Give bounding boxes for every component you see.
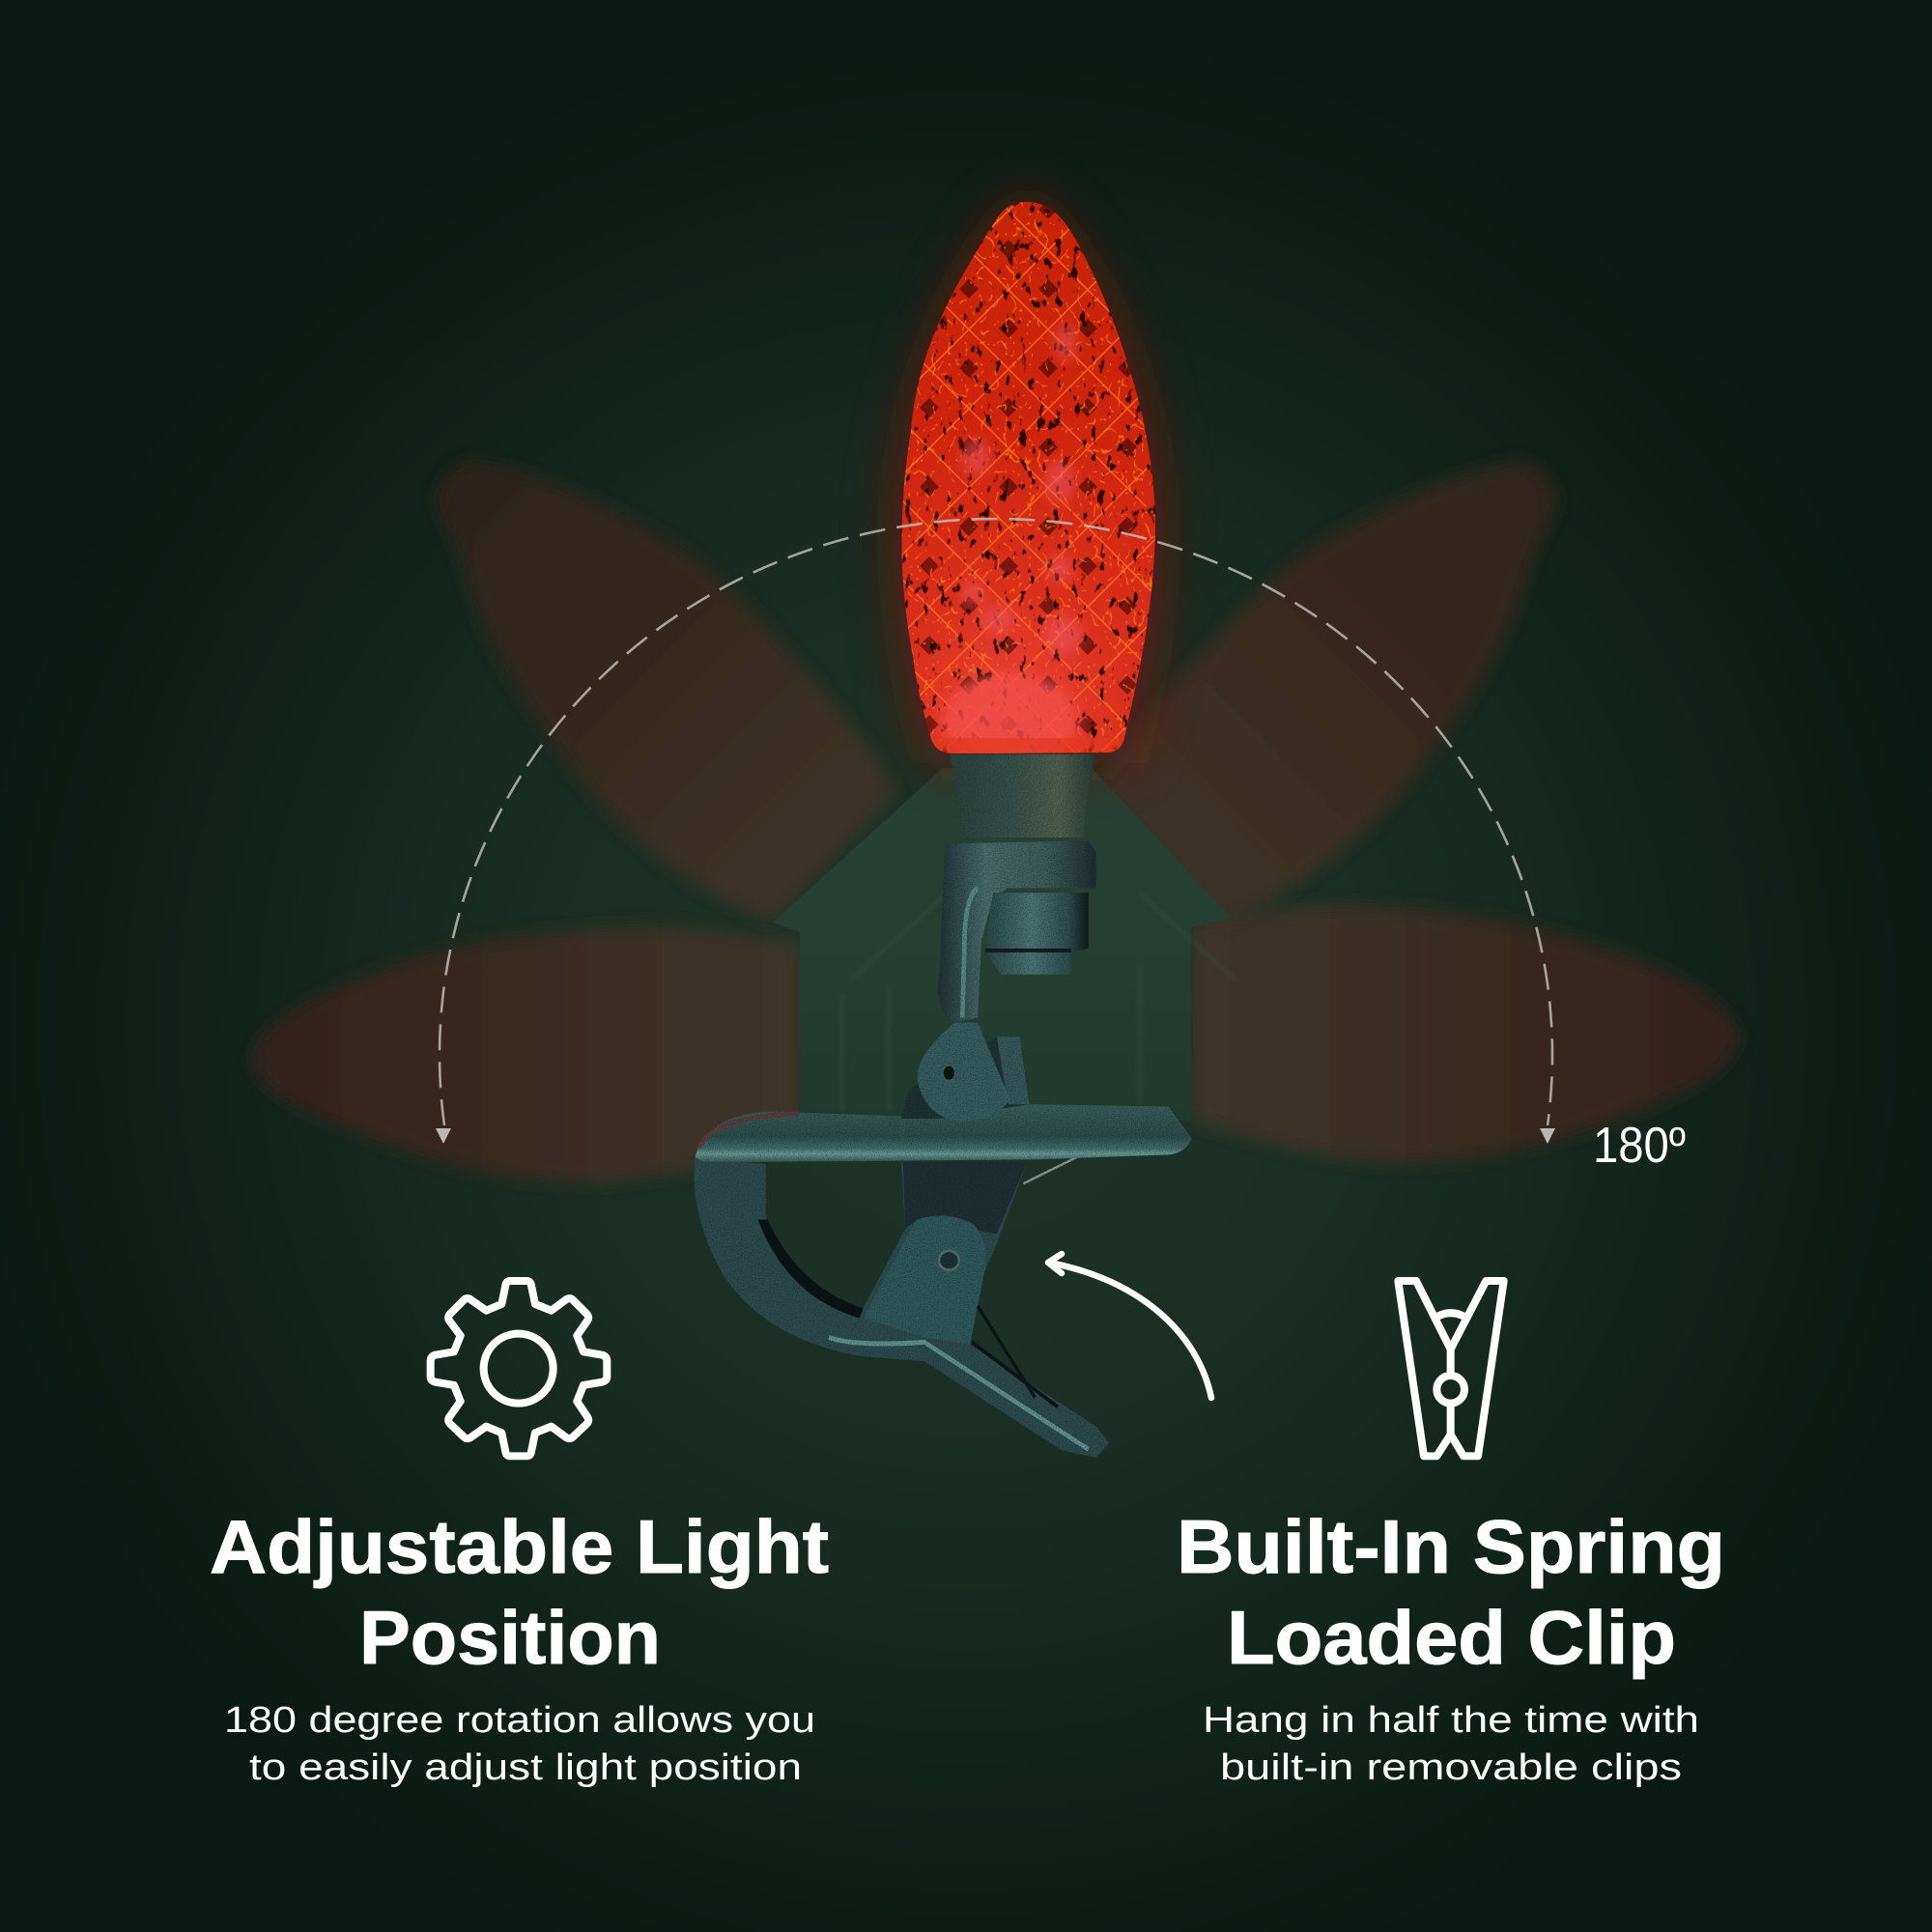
lower clip jaw bbox=[695, 1157, 1109, 1458]
red LED bulb bbox=[894, 193, 1164, 766]
arm and collar bbox=[938, 840, 1096, 1022]
curved arrow bbox=[1048, 1254, 1211, 1398]
dark clip body bbox=[903, 1162, 1027, 1234]
text: clip description: built-in removable clips bbox=[1220, 1747, 1682, 1788]
arc arrowhead left bbox=[436, 1128, 451, 1144]
ghost base inner lines bbox=[842, 894, 1236, 1111]
ghost bases: house shape bbox=[773, 768, 1236, 1121]
jaw inner shadow bbox=[758, 1219, 863, 1318]
bulb pink highlights bbox=[961, 324, 1082, 654]
dashed 180 degree arc bbox=[436, 519, 1555, 1144]
clip highlights bbox=[829, 1337, 1089, 1449]
back joint bbox=[901, 1037, 1029, 1119]
text: clip description: Hang in half the time with bbox=[1203, 1700, 1699, 1741]
heading: built-in spring loaded clip: Built-In Spring bbox=[1177, 1504, 1725, 1589]
ghost bulb: upper left bbox=[435, 460, 896, 923]
spring wire bbox=[972, 1306, 1058, 1406]
bulb socket bbox=[949, 754, 1096, 838]
heading: built-in spring loaded clip: Loaded Clip bbox=[1227, 1595, 1676, 1680]
ghost bulb: right horizontal bbox=[1192, 906, 1739, 1164]
arc arrowhead right bbox=[1540, 1128, 1555, 1144]
pivot plate bbox=[863, 1215, 986, 1345]
ghost bulb: left horizontal bbox=[253, 927, 801, 1183]
bulb lattice bbox=[894, 193, 1164, 763]
clip and socket bbox=[695, 754, 1191, 1458]
icon: gear bbox=[431, 1281, 607, 1456]
heading: adjustable light position: Adjustable Light bbox=[210, 1504, 829, 1589]
hook red edge bbox=[698, 1114, 798, 1148]
text: clip description bbox=[1203, 1700, 1699, 1788]
ball joint screw bbox=[944, 1066, 954, 1080]
text: rotation description: 180 degree rotation allows you bbox=[224, 1700, 815, 1741]
heading: built-in spring loaded clip bbox=[1177, 1504, 1725, 1680]
180 degree label: 180º bbox=[1593, 1118, 1686, 1174]
icon: clothespin bbox=[1398, 1281, 1504, 1456]
text: rotation description bbox=[224, 1700, 815, 1788]
top clip bar bbox=[696, 1104, 1191, 1162]
ghost bulb: upper right bbox=[1101, 460, 1558, 923]
heading: adjustable light position: Position bbox=[359, 1595, 661, 1680]
pivot hole bbox=[939, 1251, 959, 1270]
ball joint bbox=[918, 1022, 1010, 1121]
text: rotation description: to easily adjust light position bbox=[249, 1747, 802, 1788]
bulb glow bbox=[894, 193, 1164, 763]
arm highlight bbox=[962, 888, 978, 1018]
lower cylinder bbox=[985, 893, 1089, 975]
heading: adjustable light position bbox=[210, 1504, 829, 1680]
